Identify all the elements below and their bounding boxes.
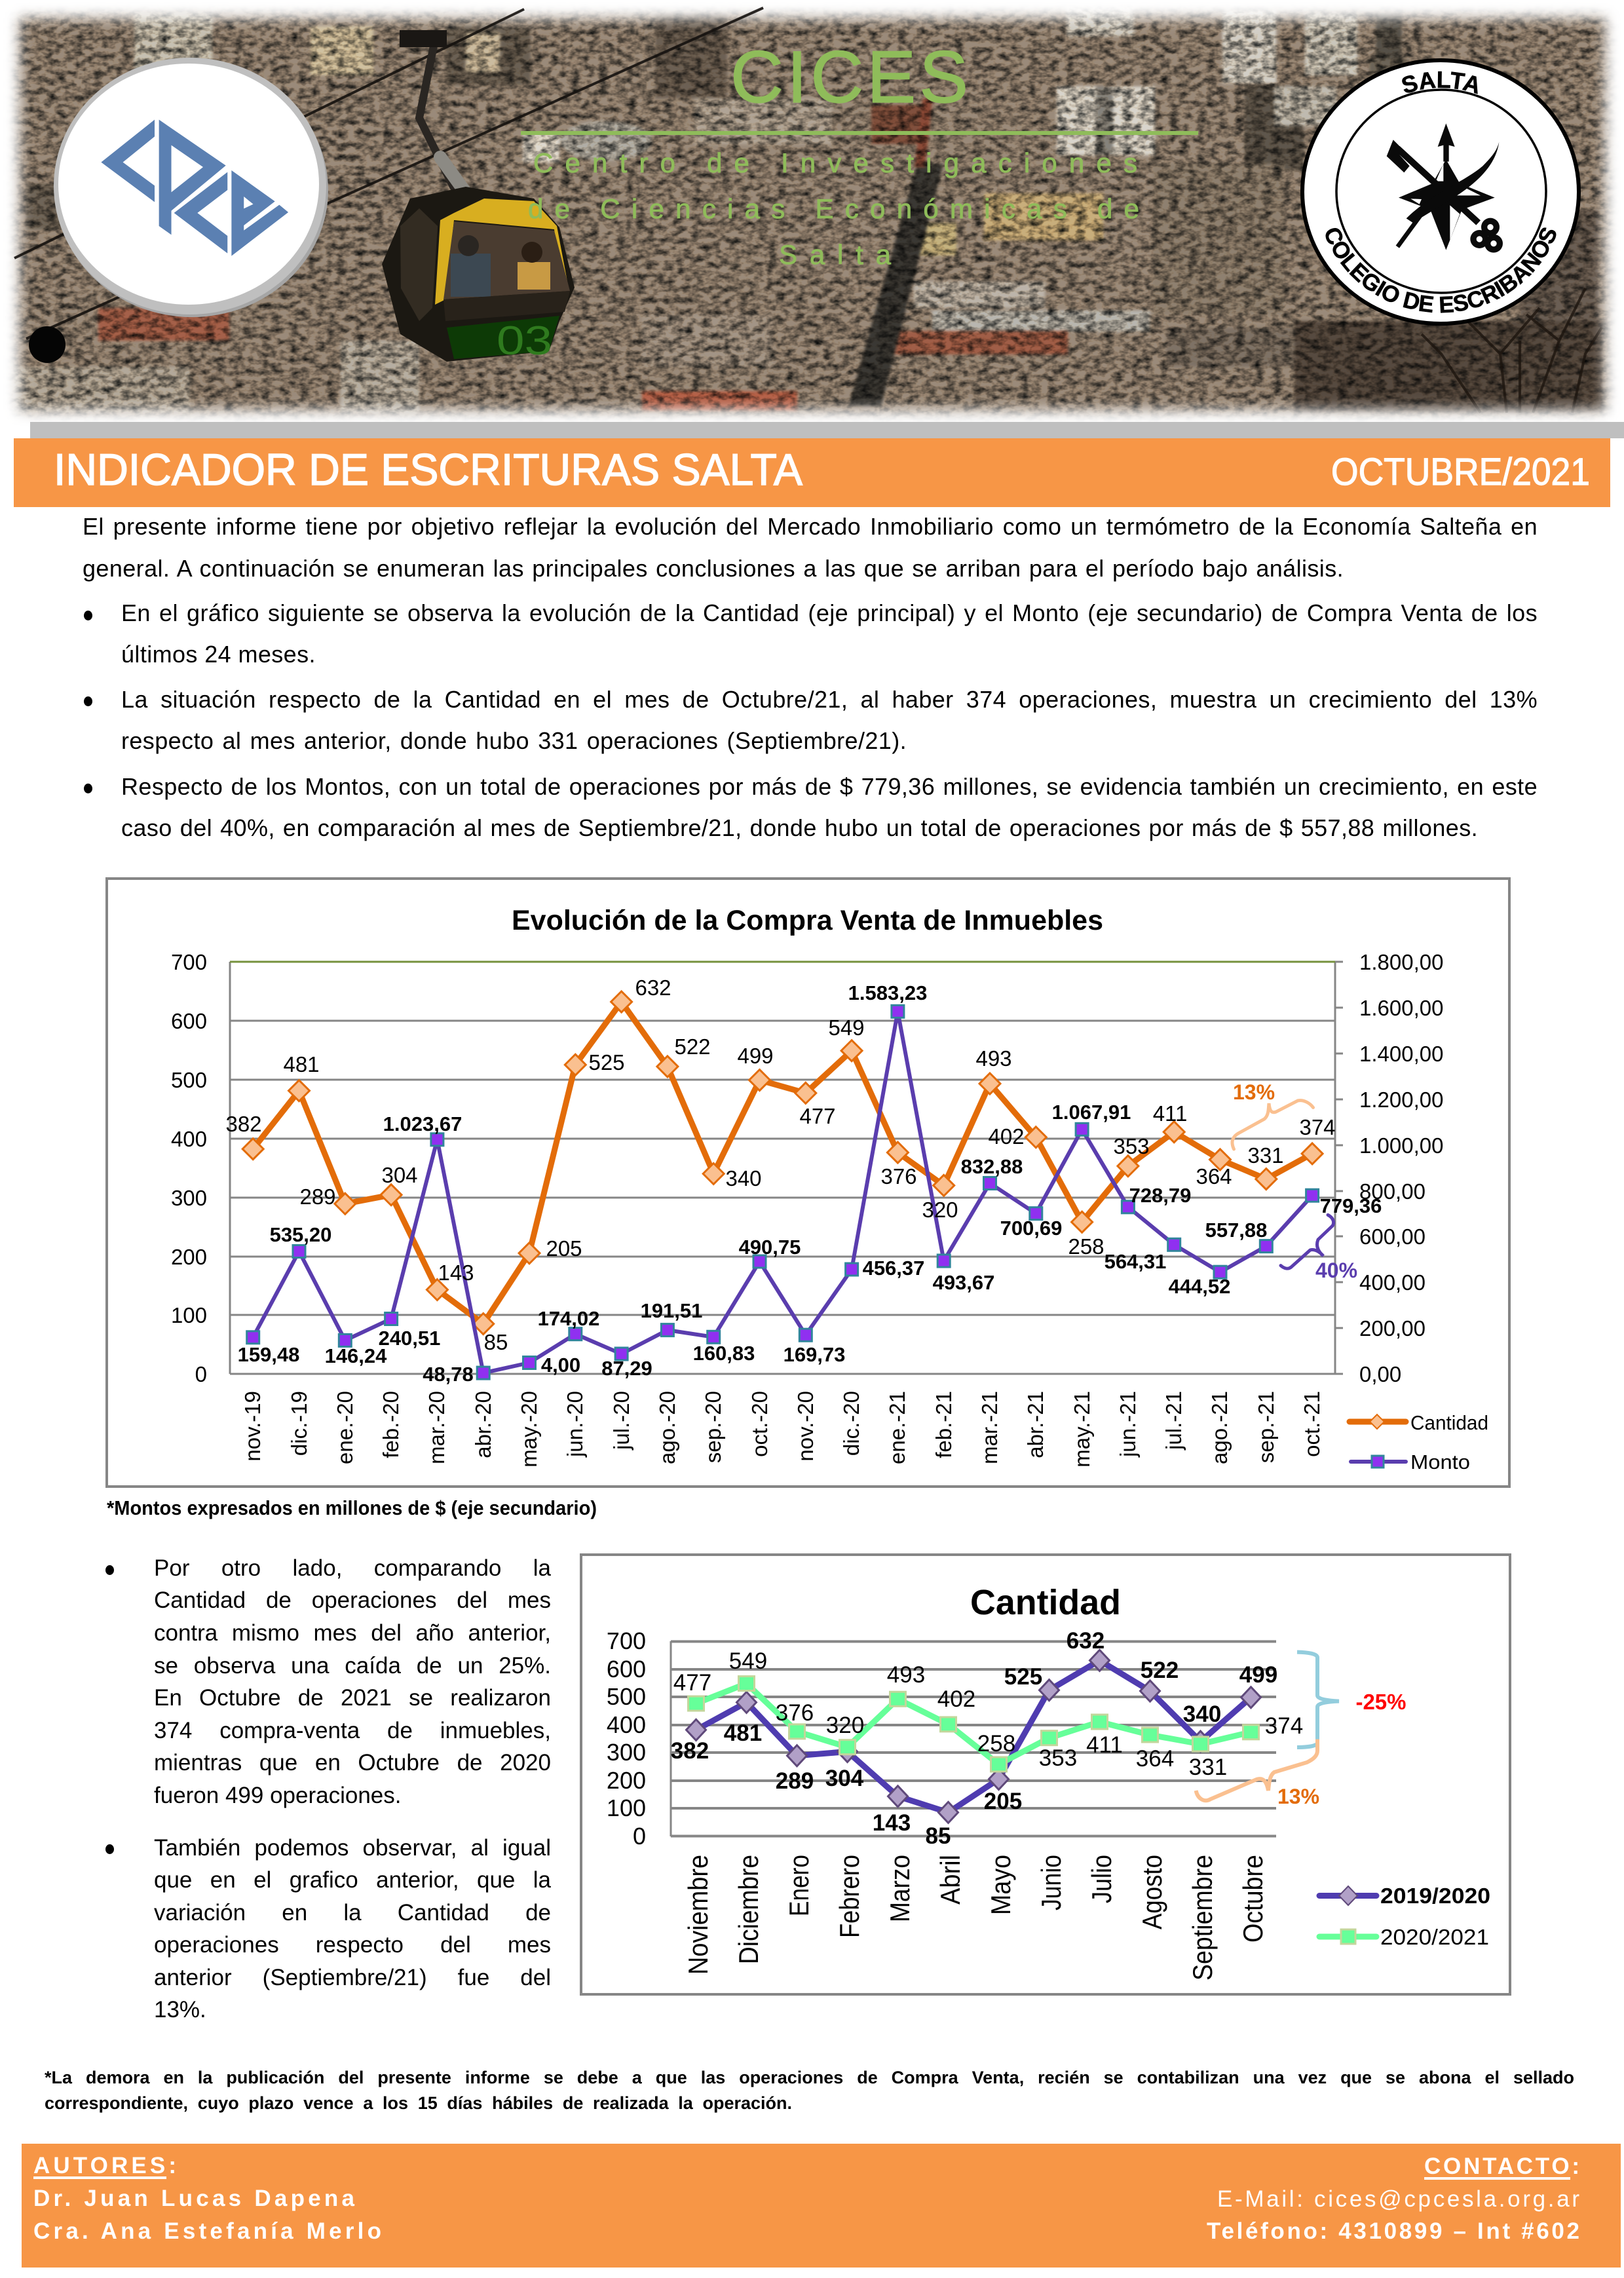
data labels: 2020/2021: 331 (1189, 1755, 1227, 1780)
data labels: Monto: 779,36 (1320, 1194, 1382, 1217)
data labels: Monto: 832,88 (961, 1155, 1023, 1178)
y axis labels: 300 (607, 1739, 646, 1766)
legend: 2019/2020 (1380, 1884, 1490, 1908)
left axis labels (171, 950, 207, 1386)
callout: 13% brace: 13% (1233, 1080, 1275, 1104)
icon: gondola cabin: 03 (497, 318, 552, 364)
header banner: city photo with cable car (9, 7, 1616, 421)
contact (1207, 2154, 1579, 2244)
text: El presente informe tiene por objetivo reflejar la evolución del Mercado Inmobiliario como un termómetro de la Economía Salteña en (83, 513, 1538, 540)
month labels: Diciembre (733, 1855, 764, 1964)
data labels: Cantidad: 353 (1113, 1134, 1150, 1158)
y axis labels: 200 (607, 1767, 646, 1794)
data labels: Cantidad: 364 (1196, 1164, 1232, 1188)
data labels: 2019/2020: 481 (724, 1720, 762, 1746)
month labels: abr.-21 (1023, 1391, 1048, 1458)
left axis labels: 500 (171, 1068, 207, 1092)
left axis labels: 200 (171, 1245, 207, 1269)
data labels: Cantidad: 374 (1299, 1115, 1336, 1139)
month labels: Febrero (834, 1855, 865, 1938)
chart note: *Montos expresados en millones de $ (eje secundario) (107, 1496, 597, 1519)
chart: Evolución de la Compra Venta de Inmuebles (107, 879, 1509, 1487)
text: se observa una caída de un 25%. (154, 1653, 551, 1679)
data labels: Monto: 493,67 (933, 1271, 994, 1294)
month labels: may.-21 (1070, 1391, 1094, 1468)
month labels (683, 1855, 1268, 1981)
left axis labels: 100 (171, 1303, 207, 1327)
series: 2019/2020 (696, 1660, 1251, 1812)
chart: Cantidad year over year: Cantidad (970, 1583, 1121, 1622)
text: La situación respecto de la Cantidad en el mes de Octubre/21, al haber 374 operaciones, muestra un crecimiento del 13% (121, 686, 1538, 713)
month labels: mar.-20 (425, 1391, 449, 1464)
text: últimos 24 meses. (121, 641, 316, 668)
legend: Cantidad (1410, 1411, 1488, 1434)
text: 374 compra-venta de inmuebles, (154, 1718, 551, 1743)
month labels: Mayo (985, 1855, 1016, 1915)
month labels: ene.-20 (333, 1391, 357, 1464)
month labels: Marzo (884, 1855, 915, 1922)
month labels: Agosto (1137, 1855, 1167, 1929)
month labels: jul.-21 (1161, 1391, 1186, 1451)
icon: dark pulley blob (29, 326, 66, 363)
right axis labels: 1.600,00 (1359, 996, 1443, 1020)
month labels: mar.-21 (977, 1391, 1002, 1464)
right axis labels: 1.400,00 (1359, 1042, 1443, 1066)
callout: 40% brace: 40% (1315, 1259, 1357, 1282)
y axis labels: 700 (607, 1627, 646, 1654)
text: *La demora en la publicación del presente informe se debe a que las operaciones de Compra Venta, recién se contabilizan una vez que se abona el sellado (45, 2068, 1574, 2087)
icon: gondola hanger arm (400, 30, 468, 197)
text: mientras que en Octubre de 2020 (154, 1750, 551, 1775)
month labels: ago.-21 (1207, 1391, 1232, 1464)
data labels: Cantidad: 411 (1153, 1101, 1187, 1126)
data labels: Cantidad: 477 (799, 1104, 836, 1128)
series: Cantidad (253, 1002, 1312, 1324)
month labels: oct.-20 (747, 1391, 772, 1457)
contact: E-Mail: cices@cpcesla.org.ar (1217, 2186, 1579, 2212)
data labels: 2020/2021: 411 (1086, 1732, 1123, 1758)
text: respecto al mes anterior, donde hubo 331 operaciones (Septiembre/21). (121, 727, 907, 754)
text: Por otro lado, comparando la (154, 1555, 551, 1581)
month labels: nov.-20 (793, 1391, 818, 1462)
data labels: 2019/2020: 499 (1239, 1662, 1277, 1688)
text: En el gráfico siguiente se observa la evolución de la Cantidad (eje principal) y el Monto (eje secundario) de Compra Venta de los (121, 599, 1538, 626)
orange title bar: OCTUBRE/2021 (1331, 451, 1590, 493)
legend (1319, 1884, 1490, 1949)
data labels: Monto: 1.067,91 (1052, 1101, 1131, 1124)
month labels: sep.-21 (1254, 1391, 1278, 1463)
logo: Colegio de Escribanos seal: COLEGIO DE ESCRIBANOS (1326, 227, 1557, 313)
icon: star, key, spear and sabre emblem (1387, 123, 1503, 253)
left axis labels: 400 (171, 1127, 207, 1151)
footer: orange authors and contact bar (22, 2144, 1621, 2268)
text: Respecto de los Montos, con un total de operaciones por más de $ 779,36 millones, se evidencia también un crecimiento, en este (121, 773, 1538, 800)
right axis labels: 600,00 (1359, 1224, 1426, 1249)
month labels: jun.-20 (563, 1391, 587, 1458)
data labels: Monto: 160,83 (693, 1342, 755, 1365)
data labels: Monto: 169,73 (784, 1343, 845, 1366)
right axis labels: 1.200,00 (1359, 1088, 1443, 1112)
y axis labels: 0 (633, 1823, 646, 1850)
gray strip under banner (30, 422, 1624, 438)
left column bullet text (105, 1555, 551, 2022)
data labels: Monto: 4,00 (541, 1354, 580, 1376)
authors: Dr. Juan Lucas Dapena (33, 2186, 355, 2211)
callout: 13% brace: 13% (1277, 1785, 1319, 1808)
banner title: CICES: CICES (730, 36, 968, 118)
text: que en el grafico anterior, que la (154, 1867, 551, 1893)
data labels: Monto: 146,24 (325, 1344, 387, 1367)
text: general. A continuación se enumeran las principales conclusiones a las que se arriban para el período bajo análisis. (83, 555, 1344, 582)
data labels: 2020/2021: 477 (673, 1670, 711, 1696)
icon: bare tree branches bottom right (1422, 288, 1602, 413)
data labels: Monto: 700,69 (1000, 1217, 1062, 1240)
month labels: sep.-20 (701, 1391, 725, 1463)
month labels: may.-20 (517, 1391, 541, 1468)
banner subtitle: Salta (779, 239, 892, 270)
logo: CPCE disk (54, 58, 328, 317)
data labels: Cantidad: 340 (725, 1166, 762, 1190)
authors (33, 2153, 381, 2244)
data labels: 2020/2021: 258 (977, 1731, 1015, 1756)
data labels: Cantidad: 143 (438, 1261, 474, 1285)
data labels: Cantidad: 481 (283, 1052, 320, 1076)
month labels: Noviembre (683, 1855, 713, 1975)
month labels: abr.-20 (471, 1391, 495, 1458)
text: Cantidad de operaciones del mes (154, 1587, 551, 1613)
month labels: feb.-21 (932, 1391, 956, 1458)
text: anterior (Septiembre/21) fue del (154, 1965, 551, 1990)
data labels: 2019/2020: 525 (1004, 1664, 1042, 1690)
data labels: Monto: 535,20 (270, 1223, 331, 1246)
data labels: Monto: 191,51 (641, 1299, 702, 1322)
text: En Octubre de 2021 se realizaron (154, 1685, 551, 1711)
authors: AUTORES: (33, 2153, 176, 2178)
y axis labels: 400 (607, 1711, 646, 1738)
data labels: 2020/2021: 353 (1039, 1745, 1077, 1771)
text: contra mismo mes del año anterior, (154, 1620, 551, 1646)
green divider under CICES (521, 131, 1198, 135)
text: variación en la Cantidad de (154, 1900, 551, 1926)
publication delay footnote (45, 2068, 1574, 2113)
data labels: 2019/2020: 143 (873, 1810, 911, 1836)
right axis labels (1359, 950, 1443, 1386)
callout: -25% brace (1297, 1652, 1407, 1747)
left axis labels: 600 (171, 1009, 207, 1033)
data labels: Monto: 728,79 (1129, 1184, 1191, 1207)
data labels: Monto: 159,48 (238, 1343, 299, 1366)
banner subtitle: de Ciencias Económicas de (528, 193, 1139, 224)
callout: -25% brace: -25% (1355, 1690, 1407, 1714)
series: 2020/2021 (696, 1684, 1251, 1764)
cables of the cable car (14, 8, 763, 339)
data labels: Cantidad: 376 (880, 1164, 917, 1188)
data labels: 2020/2021 (673, 1648, 1303, 1780)
banner subtitle (528, 147, 1139, 270)
month labels: ene.-21 (885, 1391, 909, 1464)
data labels: 2020/2021: 320 (826, 1713, 864, 1738)
authors: Cra. Ana Estefanía Merlo (33, 2218, 381, 2244)
data labels: 2020/2021: 364 (1136, 1746, 1174, 1772)
text: fueron 499 operaciones. (154, 1783, 401, 1808)
series: Monto (253, 1012, 1312, 1373)
legend: Monto (1410, 1451, 1470, 1473)
data labels: Monto: 1.023,67 (383, 1112, 462, 1135)
data labels: Cantidad: 493 (975, 1046, 1012, 1071)
y axis labels: 100 (607, 1794, 646, 1821)
data labels: Cantidad: 304 (381, 1163, 418, 1187)
data labels: 2019/2020: 382 (671, 1738, 709, 1764)
data labels: Cantidad: 258 (1068, 1234, 1105, 1259)
legend (1350, 1411, 1488, 1473)
callout: 40% brace (1281, 1215, 1357, 1282)
data labels: 2020/2021: 402 (937, 1686, 975, 1712)
data labels: Monto: 240,51 (379, 1327, 440, 1350)
intro text and first bullet list (83, 513, 1538, 841)
data labels: Cantidad: 402 (988, 1124, 1025, 1148)
callout: 13% brace (1232, 1080, 1313, 1149)
text: 13%. (154, 1997, 206, 2022)
month labels: Junio (1036, 1855, 1067, 1910)
data labels: 2020/2021: 374 (1265, 1713, 1303, 1739)
right axis labels: 1.800,00 (1359, 950, 1443, 974)
data labels: Monto: 444,52 (1169, 1275, 1230, 1298)
data labels: Cantidad: 205 (546, 1236, 582, 1261)
month labels: dic.-20 (839, 1391, 863, 1456)
data labels: Monto: 1.583,23 (848, 981, 927, 1004)
orange title bar: INDICADOR DE ESCRITURAS SALTA (54, 445, 803, 495)
right axis labels: 800,00 (1359, 1179, 1426, 1204)
banner subtitle: Centro de Investigaciones (533, 147, 1137, 178)
text: caso del 40%, en comparación al mes de Septiembre/21, donde hubo un total de operaciones por más de $ 557,88 millones. (121, 814, 1478, 841)
left axis labels: 0 (195, 1362, 207, 1386)
callout: 13% brace (1196, 1739, 1319, 1808)
right axis labels: 0,00 (1359, 1362, 1401, 1386)
data labels: Cantidad: 522 (674, 1035, 711, 1059)
month labels: Octubre (1237, 1855, 1268, 1943)
data labels: 2019/2020: 205 (984, 1789, 1022, 1814)
data labels: 2020/2021: 549 (729, 1648, 767, 1674)
data labels: Monto: 557,88 (1205, 1219, 1267, 1242)
right axis labels: 1.000,00 (1359, 1133, 1443, 1158)
month labels: feb.-20 (379, 1391, 403, 1458)
data labels: 2019/2020: 85 (926, 1823, 951, 1849)
month labels: jul.-20 (609, 1391, 633, 1451)
month labels: ago.-20 (655, 1391, 679, 1464)
y axis labels: 500 (607, 1683, 646, 1710)
month labels: nov.-19 (240, 1391, 265, 1462)
right axis labels: 200,00 (1359, 1316, 1426, 1340)
data labels: 2019/2020: 522 (1141, 1658, 1179, 1683)
text: correspondiente, cuyo plazo vence a los 15 días hábiles de realizada la operación. (45, 2093, 792, 2113)
data labels: Cantidad: 632 (635, 976, 671, 1000)
text: También podemos observar, al igual (154, 1835, 551, 1861)
data labels: Cantidad: 85 (484, 1330, 508, 1354)
orange title bar (14, 438, 1610, 507)
photo background: aerial view of the city (0, 0, 1624, 432)
month labels: Septiembre (1187, 1855, 1218, 1981)
month labels (240, 1391, 1324, 1468)
data labels: 2020/2021: 376 (776, 1700, 814, 1726)
data labels: Monto: 564,31 (1105, 1250, 1166, 1273)
logo: Colegio de Escribanos seal (1300, 58, 1581, 326)
data labels: 2020/2021: 493 (887, 1662, 925, 1688)
month labels: Abril (935, 1855, 966, 1905)
y axis labels: 600 (607, 1656, 646, 1682)
data labels: Monto (238, 981, 1382, 1386)
month labels: Julio (1086, 1855, 1117, 1903)
data labels: 2019/2020 (671, 1628, 1277, 1849)
data labels: 2019/2020: 289 (776, 1768, 814, 1794)
data labels: Cantidad: 289 (299, 1185, 336, 1209)
data labels: Monto: 87,29 (601, 1357, 652, 1380)
contact: Teléfono: 4310899 – Int #602 (1207, 2218, 1579, 2244)
chart: Cantidad year over year (581, 1555, 1510, 1994)
text: operaciones respecto del mes (154, 1932, 551, 1958)
contact: CONTACTO: (1424, 2154, 1579, 2179)
month labels: Enero (784, 1855, 814, 1916)
logo: Colegio de Escribanos seal: SALTA (1402, 71, 1478, 94)
month labels: jun.-21 (1116, 1391, 1140, 1458)
left axis labels: 700 (171, 950, 207, 974)
chart: Evolución de la Compra Venta de Inmuebles: Evolución de la Compra Venta de Inmuebles (512, 905, 1103, 936)
month labels: dic.-19 (287, 1391, 311, 1456)
left axis labels: 300 (171, 1186, 207, 1210)
right axis labels: 400,00 (1359, 1270, 1426, 1295)
icon: gondola cabin (382, 187, 575, 364)
data labels: Monto: 456,37 (863, 1257, 924, 1280)
data labels: Cantidad: 499 (737, 1044, 774, 1068)
y axis labels (607, 1627, 646, 1850)
legend: 2020/2021 (1380, 1925, 1489, 1949)
data labels: Cantidad: 331 (1247, 1143, 1284, 1167)
data labels: 2019/2020: 304 (825, 1766, 864, 1791)
data labels: Cantidad: 320 (922, 1198, 958, 1222)
data labels: Cantidad: 525 (588, 1050, 625, 1074)
data labels: Monto: 48,78 (423, 1363, 474, 1386)
data labels: Cantidad: 382 (225, 1112, 262, 1136)
data labels: Cantidad: 549 (828, 1016, 865, 1040)
data labels: 2019/2020: 632 (1067, 1628, 1105, 1654)
data labels: Cantidad (225, 976, 1336, 1354)
month labels: oct.-21 (1300, 1391, 1324, 1457)
data labels: Monto: 174,02 (538, 1307, 599, 1330)
data labels: Monto: 490,75 (739, 1236, 801, 1259)
data labels: 2019/2020: 340 (1183, 1701, 1221, 1727)
